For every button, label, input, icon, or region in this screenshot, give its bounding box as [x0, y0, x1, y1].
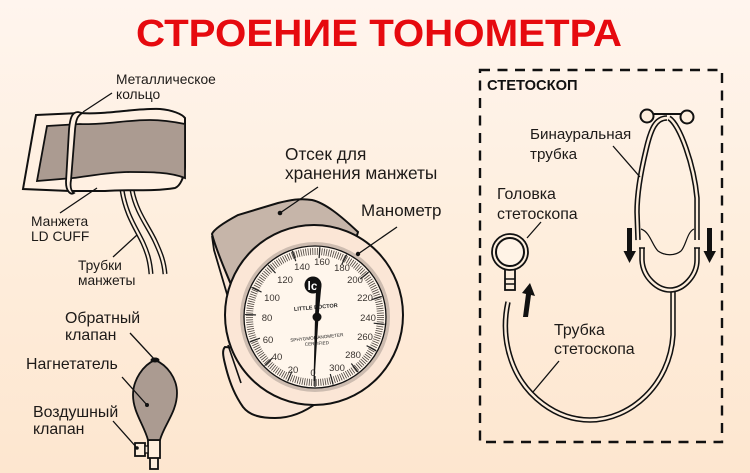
dial numbers: 120 — [277, 275, 293, 286]
title: СТРОЕНИЕ ТОНОМЕТРА — [136, 13, 622, 55]
side line — [228, 345, 241, 383]
dial brand text — [290, 303, 344, 347]
bezel — [225, 225, 403, 405]
label: metal ring — [83, 72, 216, 112]
dial numbers: 60 — [263, 335, 273, 346]
dial numbers: 220 — [357, 293, 373, 304]
label: manometer: Манометр — [361, 201, 441, 220]
bulb body — [133, 360, 177, 440]
dial numbers: 100 — [264, 293, 280, 304]
label: cuff tubes — [78, 235, 137, 288]
label: check valve: Обратный — [65, 310, 140, 327]
dial numbers: 280 — [345, 350, 361, 361]
dial numbers: 140 — [294, 262, 310, 273]
label: cuff: Манжета — [31, 214, 89, 229]
label: chest piece: стетоскопа — [497, 206, 578, 223]
lower body — [223, 347, 318, 418]
label: chest tube: Трубка — [554, 322, 605, 339]
label: air valve: Воздушный — [33, 404, 118, 421]
lower nozzle — [150, 457, 158, 469]
label: metal ring: кольцо — [116, 87, 161, 102]
label: storage compartment: хранения манжеты — [285, 163, 437, 183]
label: cuff — [31, 188, 97, 244]
label: bulb — [26, 356, 149, 407]
label: check valve: клапан — [65, 327, 116, 344]
label: check valve — [65, 310, 155, 360]
label: cuff tubes: манжеты — [78, 273, 135, 288]
label: cuff tubes: Трубки — [78, 258, 122, 273]
cuff grey panel — [37, 120, 185, 181]
body side strip — [212, 236, 250, 345]
dashed frame — [480, 70, 722, 442]
dial brand text: SPHYGMOMANOMETER — [290, 332, 344, 343]
dial numbers: 240 — [360, 313, 376, 324]
chest tube — [505, 248, 700, 420]
logo: lc — [307, 279, 318, 293]
panel: stethoscope — [480, 70, 722, 442]
check valve cap — [150, 358, 160, 362]
dial numbers: 160 — [314, 257, 330, 268]
label: chest piece — [497, 186, 578, 238]
cuff body — [23, 109, 185, 191]
metal ring — [66, 112, 82, 194]
label: cuff: LD CUFF — [31, 229, 89, 244]
dial brand text: CERTIFIED — [305, 340, 330, 347]
dial brand text: LITTLE DOCTOR — [294, 303, 338, 313]
spring — [641, 229, 694, 255]
logo — [304, 276, 322, 294]
chest piece — [492, 234, 528, 290]
storage compartment — [212, 199, 358, 290]
label: binaural tube: трубка — [530, 146, 578, 163]
dial numbers: 80 — [262, 313, 272, 324]
needle — [312, 280, 322, 381]
arrow: left down — [624, 228, 636, 263]
dial numbers: 20 — [288, 365, 298, 376]
label: storage compartment: Отсек для — [285, 144, 366, 164]
air valve — [135, 443, 148, 456]
cuff illustration — [23, 109, 185, 274]
dial numbers — [262, 257, 376, 379]
dial numbers: 40 — [272, 352, 282, 363]
arrow: right down — [704, 228, 716, 263]
dial numbers: 300 — [329, 363, 345, 374]
dial numbers: 0 — [310, 368, 316, 379]
label: manometer — [356, 201, 441, 256]
binaural tubes — [637, 110, 697, 240]
dial numbers: 200 — [347, 275, 363, 286]
collar — [148, 440, 160, 458]
panel heading: СТЕТОСКОП — [487, 78, 578, 94]
manometer illustration — [212, 199, 403, 418]
arrow: up — [522, 283, 535, 317]
label: binaural tube — [530, 126, 640, 177]
label: air valve — [33, 404, 139, 450]
dial ticks — [245, 247, 385, 387]
dial numbers: 260 — [357, 332, 373, 343]
label: binaural tube: Бинауральная — [530, 126, 631, 143]
label: storage compartment — [278, 144, 437, 215]
label: chest tube: стетоскопа — [554, 341, 635, 358]
cuff tubes — [122, 190, 165, 274]
label: air valve: клапан — [33, 421, 84, 438]
dial numbers: 180 — [334, 263, 350, 274]
dial face — [244, 246, 386, 388]
label: bulb: Нагнетатель — [26, 356, 118, 373]
label: chest piece: Головка — [497, 186, 556, 203]
label: metal ring: Металлическое — [116, 72, 216, 87]
bulb illustration — [133, 358, 177, 469]
label: chest tube — [533, 322, 635, 392]
